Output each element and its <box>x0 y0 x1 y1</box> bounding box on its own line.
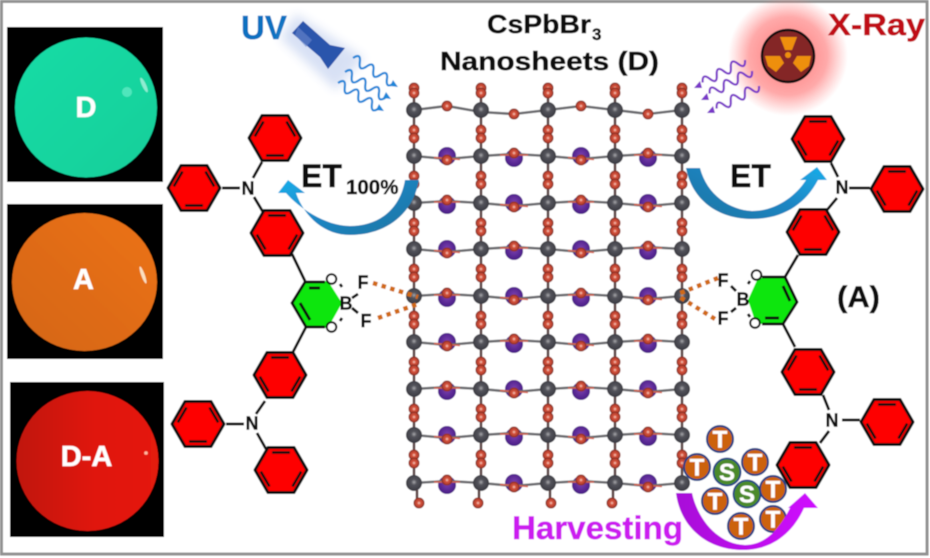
arrow: ET right <box>686 167 827 219</box>
(A) label: (A) <box>837 281 880 314</box>
exciton cluster: T <box>766 506 781 534</box>
photo: sample A: A <box>73 264 94 296</box>
molecule: left acceptor: B <box>340 294 352 314</box>
molecule: right acceptor: N <box>836 178 848 198</box>
dotted bonds: left <box>373 283 418 318</box>
photo: sample D-A: D-A <box>61 441 112 473</box>
molecule: right acceptor: F <box>718 308 728 328</box>
arrow: ET left <box>278 180 419 235</box>
photo: sample A <box>7 204 163 359</box>
UV waves <box>336 54 398 112</box>
heading: CsPbBr3 Nanosheets (D): CsPbBr <box>487 9 591 39</box>
X-Ray label: X-Ray <box>828 7 926 42</box>
exciton cluster: T <box>690 454 705 482</box>
heading: CsPbBr3 Nanosheets (D) <box>440 9 659 76</box>
ET 100% label: 100% <box>346 176 398 199</box>
photo: sample D: D <box>76 92 96 124</box>
ET 100% label: ET <box>301 158 342 194</box>
molecule: left acceptor <box>168 116 372 492</box>
exciton cluster: T <box>748 450 763 476</box>
ET label: ET <box>730 158 771 194</box>
molecule: left acceptor: F <box>360 311 372 331</box>
molecule: left acceptor: N <box>246 414 258 434</box>
photo: sample D-A <box>10 382 164 537</box>
icon: UV flashlight <box>280 14 364 90</box>
molecule: left acceptor: N <box>242 178 254 198</box>
photo: sample D <box>7 27 163 182</box>
molecule: right acceptor: N <box>826 410 838 430</box>
X-Ray waves <box>694 56 761 113</box>
exciton cluster: T <box>713 426 728 454</box>
exciton cluster: T <box>734 514 749 540</box>
ET 100% label <box>301 158 398 199</box>
molecule: left acceptor: F <box>358 272 368 292</box>
UV label: UV <box>241 9 287 46</box>
exciton cluster <box>684 426 786 540</box>
icon: radiation symbol <box>762 30 814 82</box>
molecule: right acceptor: B <box>736 290 750 310</box>
Harvesting label: Harvesting <box>512 510 683 546</box>
arrow: harvesting <box>676 493 818 550</box>
exciton cluster: S <box>719 460 735 486</box>
heading: CsPbBr3 Nanosheets (D): Nanosheets (D) <box>440 46 659 76</box>
crystal lattice <box>406 83 690 508</box>
molecule: right acceptor <box>718 116 923 488</box>
exciton cluster: T <box>766 476 781 504</box>
dotted bonds: right <box>678 278 718 319</box>
heading: CsPbBr3 Nanosheets (D): 3 <box>592 25 601 44</box>
exciton cluster: S <box>739 482 755 508</box>
exciton cluster: T <box>708 488 723 516</box>
X-Ray glow <box>728 0 848 116</box>
molecule: right acceptor: F <box>718 270 728 290</box>
